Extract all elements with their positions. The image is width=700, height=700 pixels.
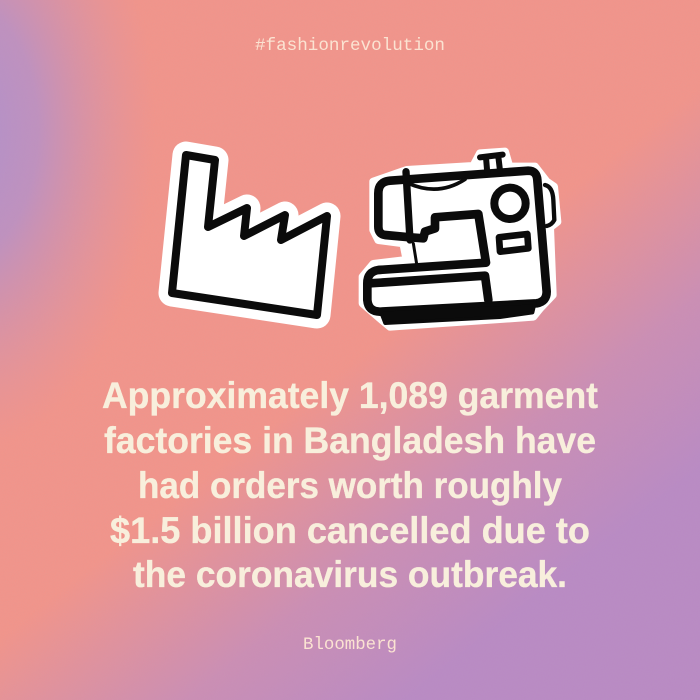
dial	[494, 188, 526, 219]
main statement: the coronavirus outbreak.	[133, 554, 567, 595]
needle bar	[406, 172, 410, 240]
icon: sewing machine sticker	[363, 152, 557, 327]
hand wheel	[545, 185, 554, 226]
main statement: Approximately 1,089 garment	[102, 375, 598, 416]
main statement: had orders worth roughly	[138, 465, 562, 506]
hashtag: #fashionrevolution	[255, 37, 445, 56]
main statement: factories in Bangladesh have	[104, 420, 596, 461]
sticker backing	[363, 152, 557, 327]
icon: factory sticker	[172, 155, 327, 315]
thread	[408, 179, 465, 189]
source: Bloomberg	[303, 636, 397, 655]
needle	[413, 243, 417, 264]
main statement	[102, 375, 598, 595]
machine outline	[367, 171, 547, 312]
main statement: $1.5 billion cancelled due to	[110, 510, 590, 551]
spool pin	[480, 155, 503, 173]
button	[499, 234, 528, 252]
machine foot	[380, 303, 535, 323]
base plate	[370, 276, 488, 300]
